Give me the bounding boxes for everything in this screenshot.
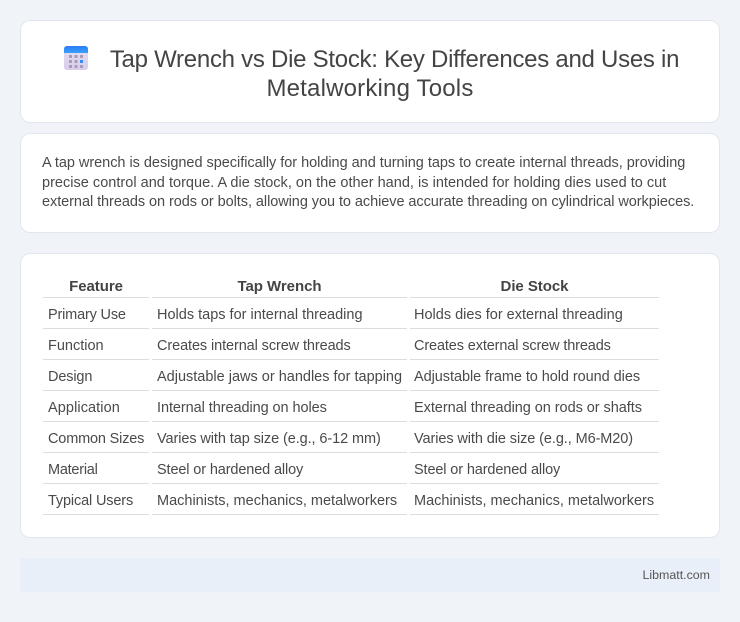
- intro paragraph: [42, 155, 694, 210]
- row: design: Design: [48, 369, 92, 385]
- row: typical users: [43, 493, 659, 515]
- title: [110, 46, 679, 102]
- row: common sizes: [43, 431, 659, 453]
- row: design: Adjustable jaws or handles for tapping: [157, 369, 402, 385]
- row: application: Application: [48, 400, 120, 416]
- panel: intro text: [20, 133, 720, 233]
- row: application: Internal threading on holes: [157, 400, 327, 416]
- row: material: Material: [48, 462, 98, 478]
- panel: comparison table: [20, 253, 720, 538]
- row: function: Creates external screw threads: [414, 338, 611, 354]
- row: primary use: Holds taps for internal threading: [157, 307, 363, 323]
- intro paragraph: precise control and torque. A die stock, on the other hand, is intended for holding dies used to cut: [42, 174, 666, 190]
- table header: [43, 278, 659, 298]
- row: common sizes: Varies with tap size (e.g., 6-12 mm): [157, 431, 381, 447]
- intro paragraph: external threads on rods or bolts, allowing you to achieve accurate threading on cylindrical workpieces.: [42, 194, 694, 210]
- row: function: Creates internal screw threads: [157, 338, 351, 354]
- table header: Feature: [69, 278, 123, 295]
- row: material: [43, 462, 659, 484]
- row: material: Steel or hardened alloy: [414, 462, 560, 478]
- title: Tap Wrench vs Die Stock: Key Differences and Uses in: [110, 46, 679, 73]
- intro paragraph: A tap wrench is designed specifically for holding and turning taps to create internal threads, providing: [42, 155, 685, 171]
- table header: Die Stock: [501, 278, 568, 295]
- panel: title card: [20, 20, 720, 123]
- row: design: Adjustable frame to hold round dies: [414, 369, 640, 385]
- row: typical users: Machinists, mechanics, metalworkers: [157, 493, 397, 509]
- row: primary use: Primary Use: [48, 307, 126, 323]
- row: design: [43, 369, 659, 391]
- row: application: [43, 400, 659, 422]
- table header: Tap Wrench: [238, 278, 321, 295]
- row: primary use: Holds dies for external threading: [414, 307, 623, 323]
- panel: footer: [20, 558, 720, 592]
- row: typical users: Typical Users: [48, 493, 133, 509]
- icon: calendar: [64, 46, 88, 70]
- row: application: External threading on rods or shafts: [414, 400, 642, 416]
- row: primary use: [43, 307, 659, 329]
- row: function: Function: [48, 338, 104, 354]
- title: Metalworking Tools: [266, 75, 474, 102]
- row: typical users: Machinists, mechanics, metalworkers: [414, 493, 654, 509]
- row: common sizes: Common Sizes: [48, 431, 144, 447]
- footer text: Libmatt.com: [643, 568, 710, 582]
- row: function: [43, 338, 659, 360]
- row: common sizes: Varies with die size (e.g., M6-M20): [414, 431, 633, 447]
- row: material: Steel or hardened alloy: [157, 462, 303, 478]
